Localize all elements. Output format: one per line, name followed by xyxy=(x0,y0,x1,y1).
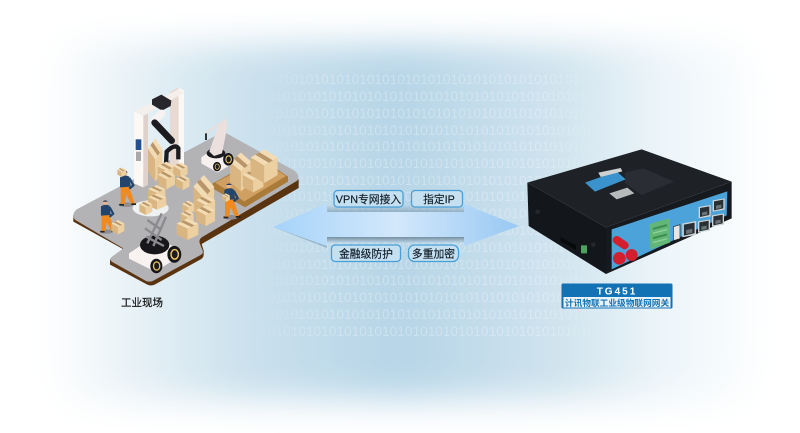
binary digits pattern: 101010101010101010101010101010101010101010101010 xyxy=(245,223,611,238)
platform edge xyxy=(73,179,299,285)
wooden pallet xyxy=(213,157,288,207)
pill: fixed IP: 指定IP xyxy=(423,192,455,206)
small cart with boxes xyxy=(133,185,169,216)
binary digits pattern: 101010101010101010101010101010101010101010101010 xyxy=(245,123,611,138)
background glow xyxy=(46,44,754,400)
gantry with robot arm xyxy=(134,87,184,187)
illustration: industrial site xyxy=(73,87,299,285)
binary digits pattern: 010101010101010101010101010101010101010101010101 xyxy=(245,206,610,221)
binary digits pattern: 101010101010101010101010101010101010101010101010 xyxy=(245,189,611,204)
device top face xyxy=(527,149,732,227)
pill: VPN: VPN专网接入 xyxy=(336,192,401,206)
mobile robot arm, back xyxy=(201,119,234,173)
pill: finance-grade protection: 金融级防护 xyxy=(339,246,393,260)
red antenna connectors xyxy=(613,240,638,265)
pill: multiple encryption: 多重加密 xyxy=(412,246,455,260)
device right face xyxy=(606,182,732,274)
top label xyxy=(585,168,674,199)
binary digits pattern xyxy=(292,74,563,336)
ethernet ports xyxy=(682,198,725,237)
binary digits pattern: 010101010101010101010101010101010101010101010101 xyxy=(245,240,610,255)
device: TG451 gateway xyxy=(527,149,732,274)
binary digits pattern: 010101010101010101010101010101010101010101010101 xyxy=(245,139,610,154)
binary digits pattern: 101010101010101010101010101010101010101010101010 xyxy=(245,290,611,305)
product label: 计讯物联工业级物联网网关 xyxy=(565,297,669,308)
blue front panel xyxy=(612,191,727,269)
platform floor xyxy=(73,132,298,282)
binary digits pattern: 101010101010101010101010101010101010101010101010 xyxy=(245,324,611,339)
double arrow xyxy=(273,203,519,248)
cardboard boxes xyxy=(148,138,278,240)
side connector xyxy=(535,209,596,253)
pill: VPN xyxy=(334,190,403,207)
binary digits pattern: 010101010101010101010101010101010101010101010101 xyxy=(245,72,610,87)
pill: multiple encryption xyxy=(408,245,458,262)
workers xyxy=(100,167,240,234)
product label xyxy=(562,284,672,308)
label: industrial site: 工业现场 xyxy=(121,296,163,309)
binary digits pattern: 101010101010101010101010101010101010101010101010 xyxy=(245,156,611,171)
mobile robot, front xyxy=(129,213,181,273)
USB port xyxy=(673,225,680,241)
binary digits pattern: 101010101010101010101010101010101010101010101010 xyxy=(245,89,611,104)
device left face xyxy=(527,183,606,274)
binary digits pattern: 010101010101010101010101010101010101010101010101 xyxy=(245,173,610,188)
pill: fixed IP xyxy=(412,190,462,207)
binary digits pattern: 101010101010101010101010101010101010101010101010 xyxy=(245,257,611,272)
binary digits pattern: 010101010101010101010101010101010101010101010101 xyxy=(245,307,610,322)
pill: finance-grade protection xyxy=(332,245,400,262)
product label: TG451 xyxy=(597,286,637,298)
binary digits pattern: 010101010101010101010101010101010101010101010101 xyxy=(245,106,610,121)
binary digits pattern: 010101010101010101010101010101010101010101010101 xyxy=(245,273,610,288)
green terminal block xyxy=(650,218,670,249)
